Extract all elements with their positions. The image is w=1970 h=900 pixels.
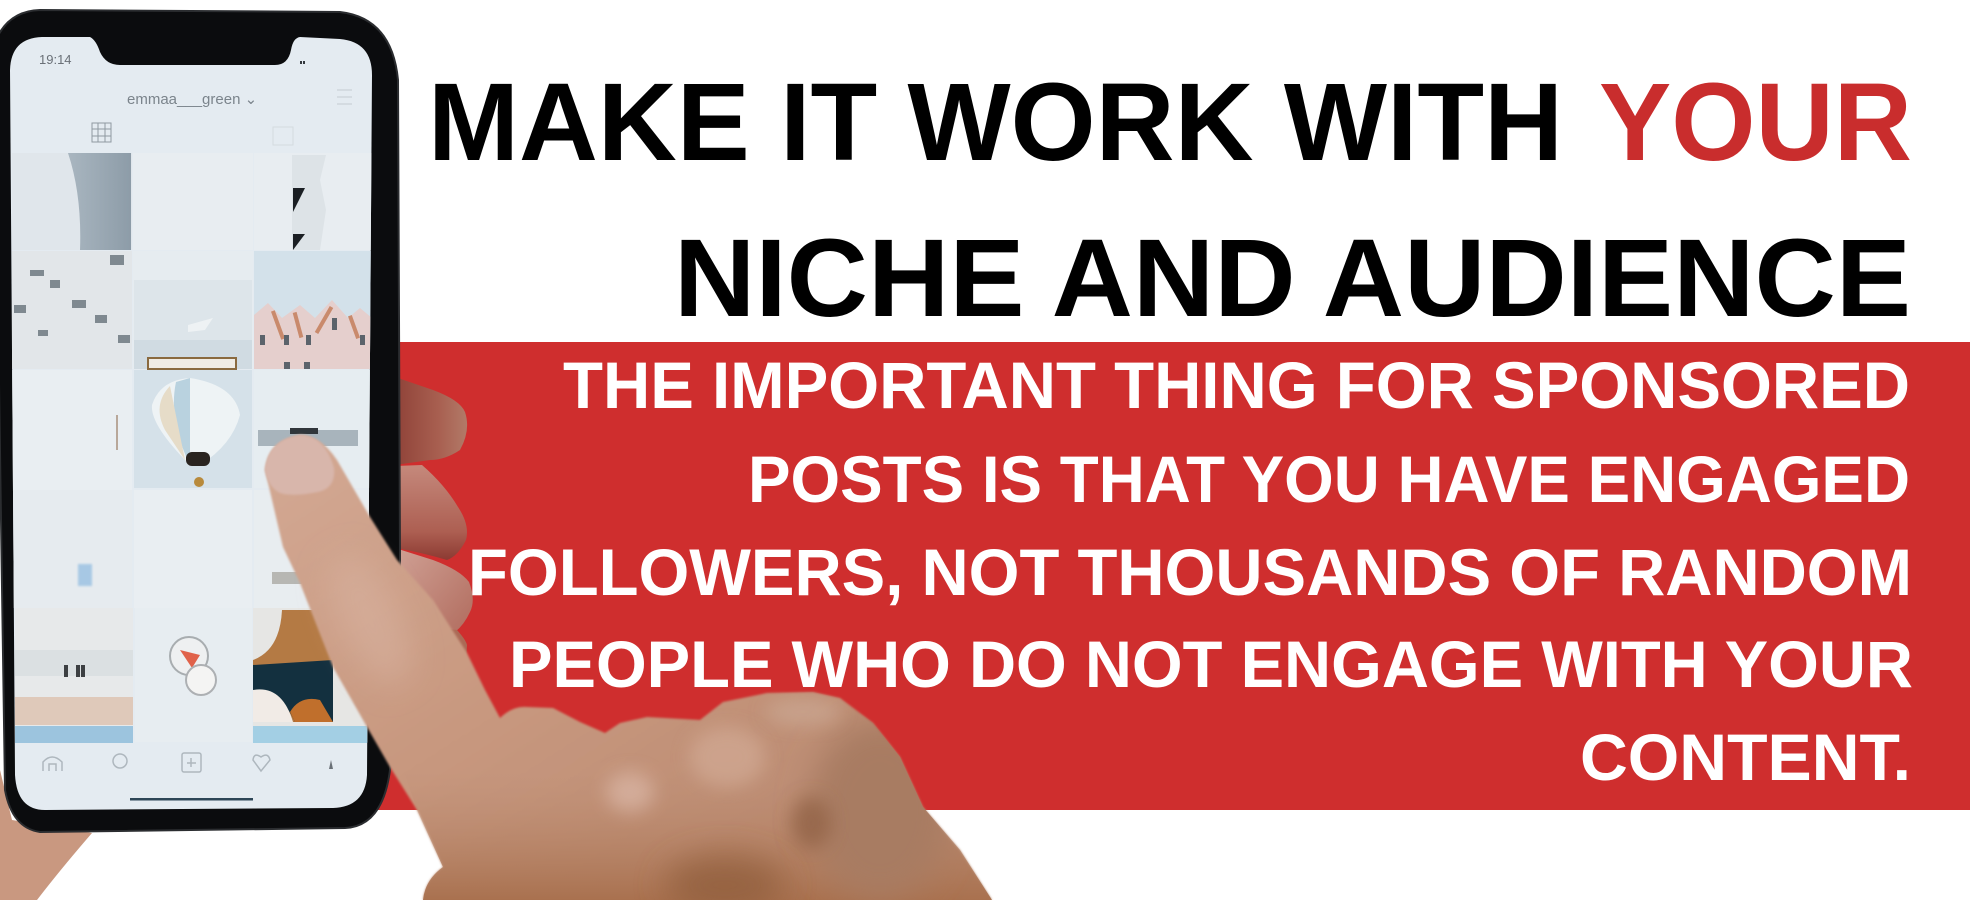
profile grid [12,153,372,743]
phone [0,10,1020,900]
phone body [0,10,400,832]
body text: POSTS IS THAT YOU HAVE ENGAGED [748,442,1910,516]
body text: THE IMPORTANT THING FOR SPONSORED [563,348,1910,422]
knuckle highlights [606,772,654,812]
balloon [152,378,240,487]
pointing hand [265,435,1020,900]
status and profile header [39,52,352,145]
title: NICHE AND AUDIENCE [674,217,1911,340]
fingernail [265,435,334,495]
body text: CONTENT. [1580,720,1911,794]
title: MAKE IT WORK WITH [428,61,1563,184]
status and profile header: 19:14 [39,52,72,67]
phone screen [10,37,372,810]
knuckle shading [400,698,1020,900]
body text: PEOPLE WHO DO NOT ENGAGE WITH YOUR [509,627,1913,701]
finger highlight [313,544,427,696]
ring [170,637,216,695]
body text [468,348,1913,794]
status and profile header: emmaa___green ⌄ [127,91,257,108]
title: YOUR [1599,61,1912,184]
tab bar icons [43,753,333,772]
home indicator [130,798,253,800]
fingers behind phone [395,377,473,660]
title [428,61,1912,340]
body text: FOLLOWERS, NOT THOUSANDS OF RANDOM [468,535,1912,609]
palm below phone [0,770,92,900]
finger and knuckles [265,435,992,900]
red banner [370,342,1970,810]
